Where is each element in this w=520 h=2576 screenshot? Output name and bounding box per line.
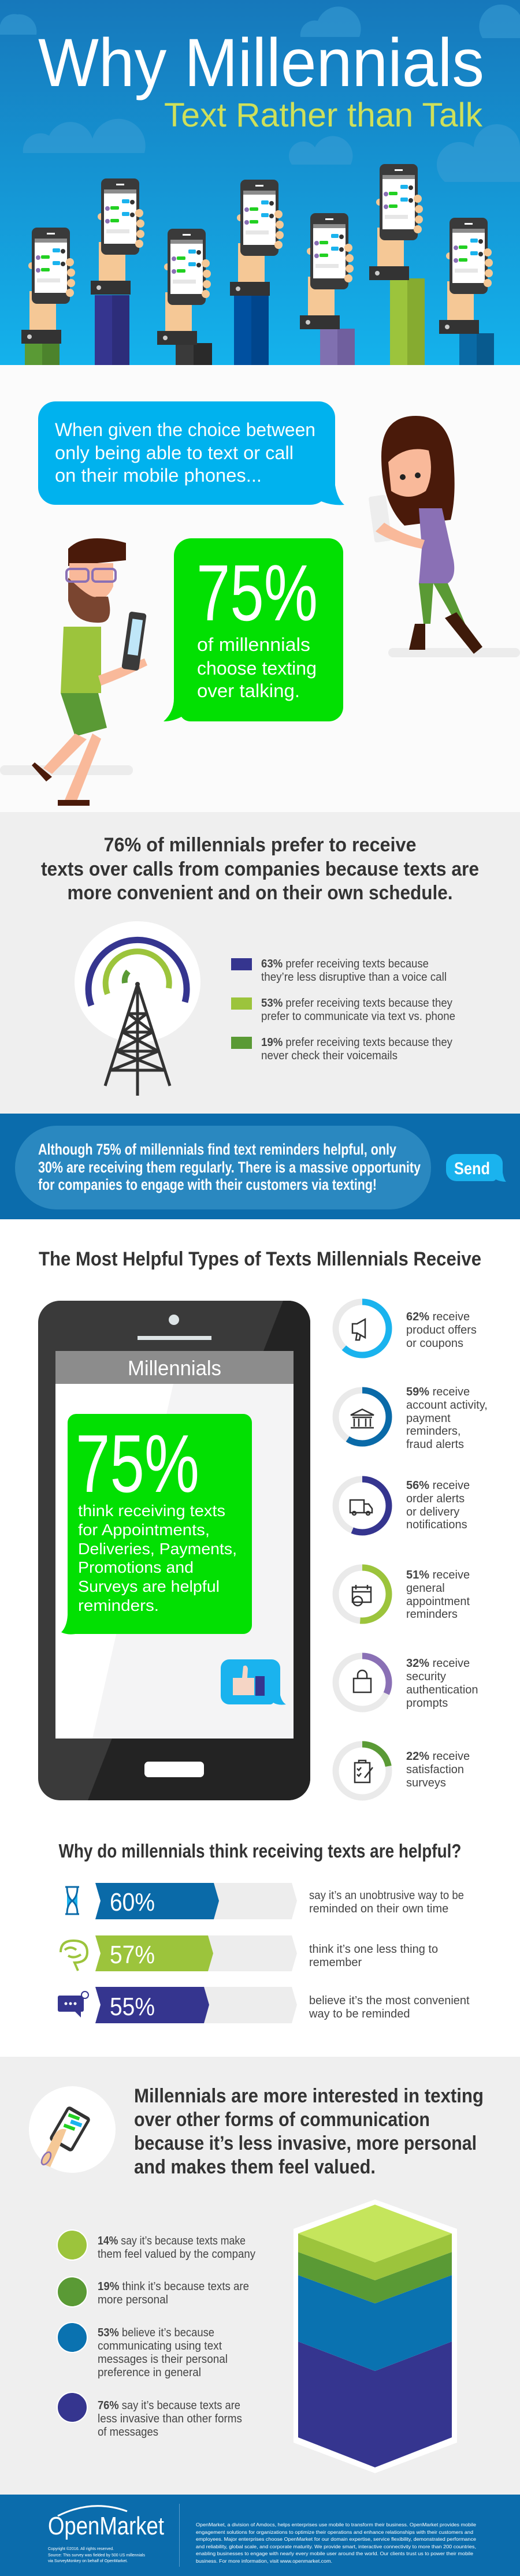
icon: thumbs up bubble bbox=[221, 1659, 286, 1705]
icon: signal tower bbox=[75, 921, 200, 1096]
bar chart: reasons helpful: reminded on their own time bbox=[309, 1903, 448, 1915]
text: 30% are receiving them regularly. There is a massive opportunity bbox=[38, 1159, 421, 1176]
copyright and source: Source: This survey was fielded by 500 US millennials bbox=[48, 2553, 145, 2558]
heading: more interested: because it’s less invasive, more personal bbox=[134, 2132, 477, 2154]
footer about text: OpenMarket, a division of Amdocs, helps enterprises use mobile to transform their business. OpenMarket provides mobile bbox=[196, 2522, 476, 2527]
section: texting vs calling background bbox=[0, 365, 520, 812]
legend: reasons interested: messages is their personal bbox=[98, 2353, 228, 2366]
legend: reasons interested: 14% say it’s because texts make bbox=[98, 2235, 246, 2247]
heading: more interested: over other forms of communication bbox=[134, 2109, 430, 2131]
donut labels: product offers bbox=[406, 1324, 477, 1337]
green bubble: 75% helpful: Surveys are helpful bbox=[78, 1577, 220, 1595]
big phone illustration: Millennials bbox=[128, 1356, 221, 1380]
donut labels: general bbox=[406, 1582, 445, 1595]
icon: hourglass bbox=[65, 1887, 79, 1914]
heading: more interested bbox=[134, 2085, 484, 2178]
speech bubble: question bbox=[38, 401, 344, 505]
bar chart: reasons helpful: think it’s one less thing to bbox=[309, 1943, 438, 1956]
donut labels: 22% receive bbox=[406, 1750, 470, 1763]
donut labels: fraud alerts bbox=[406, 1438, 464, 1451]
footer about text: enabling businesses to engage with nearly every mobile user around the world. Our clients trust us to power their mobile bbox=[196, 2551, 473, 2556]
guy character bbox=[0, 538, 147, 806]
bar chart: reasons helpful: remember bbox=[309, 1956, 362, 1969]
text: Although 75% of millennials find text reminders helpful, only bbox=[38, 1141, 396, 1158]
speech bubble: question: only being able to text or call bbox=[55, 442, 294, 463]
girl character bbox=[369, 416, 520, 657]
legend: reasons interested: more personal bbox=[98, 2294, 168, 2306]
banner: opportunity bbox=[0, 1114, 520, 1219]
donut labels: order alerts bbox=[406, 1492, 465, 1505]
donut labels: or delivery bbox=[406, 1506, 459, 1518]
donut labels: authentication bbox=[406, 1684, 478, 1696]
heading: most helpful types: The Most Helpful Types of Texts Millennials Receive bbox=[39, 1248, 481, 1270]
green bubble: 75% helpful: Promotions and bbox=[78, 1558, 194, 1576]
donut labels: reminders, bbox=[406, 1425, 460, 1438]
footer about text: business. For more information, visit www.openmarket.com. bbox=[196, 2558, 332, 2564]
legend: reasons interested: 76% say it’s because texts are bbox=[98, 2399, 240, 2412]
copyright and source bbox=[48, 2547, 145, 2563]
heading: 76% prefer texts bbox=[41, 834, 479, 904]
section: preference for texts from companies bbox=[0, 812, 520, 1114]
heading: more interested: Millennials are more interested in texting bbox=[134, 2085, 484, 2107]
heading: more interested: and makes them feel valued. bbox=[134, 2156, 376, 2178]
footer about text: and reliability, global scale, and corporate maturity. We provide smart, interactive connectivity to more than 200 countries, bbox=[196, 2544, 476, 2549]
legend: reasons interested bbox=[57, 2230, 255, 2439]
bar chart: reasons helpful: way to be reminded bbox=[309, 2008, 410, 2020]
donut labels: 51% receive bbox=[406, 1569, 470, 1581]
icon: hand with tablet bbox=[29, 2086, 116, 2173]
footer about text: employees. Major enterprises choose OpenMarket for our domain expertise, service flexibility, demonstrated performance bbox=[196, 2536, 476, 2542]
footer bbox=[0, 2495, 520, 2576]
donut labels: 56% receive bbox=[406, 1479, 470, 1492]
heading: 76% prefer texts: texts over calls from companies because texts are bbox=[41, 858, 479, 880]
green bubble: 75% helpful: reminders. bbox=[78, 1596, 159, 1614]
footer about text: engagement solutions for organizations to optimize their operations and enhance relationships with their customers and bbox=[196, 2529, 473, 2535]
donut labels: 62% receive bbox=[406, 1311, 470, 1323]
section: more interested in texting bbox=[0, 2057, 520, 2495]
legend: reasons interested: them feel valued by the company bbox=[98, 2248, 255, 2261]
hero background bbox=[0, 0, 520, 365]
donut labels: security bbox=[406, 1670, 446, 1683]
logo: OpenMarket: OpenMarket bbox=[48, 2512, 164, 2540]
speech bubble: 75% stat: choose texting bbox=[197, 658, 317, 679]
donut labels: appointment bbox=[406, 1595, 470, 1608]
green bubble: 75% helpful: Deliveries, Payments, bbox=[78, 1540, 237, 1558]
chart: stacked prism bbox=[294, 2199, 457, 2473]
legend: reasons interested: preference in general bbox=[98, 2366, 201, 2379]
legend: reasons interested: 53% believe it’s because bbox=[98, 2326, 214, 2339]
section: helpful types background bbox=[0, 1219, 520, 2057]
bar chart: reasons helpful: 55% bbox=[110, 1993, 155, 2021]
donut icons bbox=[350, 1319, 374, 1782]
green bubble: 75% helpful: 75% bbox=[76, 1418, 199, 1510]
speech bubble: question: When given the choice between bbox=[55, 419, 315, 440]
donut labels: prompts bbox=[406, 1697, 448, 1710]
legend: reasons interested: of messages bbox=[98, 2426, 158, 2439]
donut charts: types of texts bbox=[336, 1302, 389, 1797]
heading: 76% prefer texts: more convenient and on their own schedule. bbox=[67, 882, 453, 904]
bar chart: reasons helpful: 60% bbox=[110, 1888, 155, 1916]
bar chart: reasons helpful: say it’s an unobtrusive way to be bbox=[309, 1889, 464, 1902]
copyright and source: via SurveyMonkey on behalf of OpenMarket. bbox=[48, 2559, 128, 2563]
legend: reasons: 53% prefer receiving texts because they bbox=[261, 997, 452, 1010]
legend: reasons: 63% prefer receiving texts because bbox=[261, 958, 429, 970]
legend: reasons interested: 19% think it’s because texts are bbox=[98, 2280, 249, 2293]
green bubble: 75% helpful bbox=[61, 1414, 252, 1635]
big phone illustration bbox=[38, 1301, 310, 1800]
donut labels: payment bbox=[406, 1412, 451, 1425]
donut labels: or coupons bbox=[406, 1337, 463, 1350]
green bubble: 75% helpful: think receiving texts bbox=[78, 1502, 225, 1520]
decorative clouds bbox=[0, 5, 520, 182]
subtitle: Text Rather than Talk bbox=[164, 96, 483, 134]
donut labels: account activity, bbox=[406, 1399, 488, 1412]
speech bubble: 75% stat: over talking. bbox=[197, 680, 300, 701]
legend: reasons: never check their voicemails bbox=[261, 1049, 398, 1062]
legend: reasons bbox=[231, 958, 455, 1062]
bar chart: reasons helpful bbox=[95, 1883, 470, 2023]
donut labels: notifications bbox=[406, 1518, 467, 1531]
bar chart: reasons helpful: believe it’s the most convenient bbox=[309, 1994, 470, 2007]
icon: chat notification bbox=[58, 1991, 88, 2017]
speech bubble: question: on their mobile phones... bbox=[55, 465, 262, 486]
speech bubble: 75% stat: of millennials bbox=[197, 634, 310, 655]
send button bubble bbox=[446, 1154, 506, 1182]
send button bubble: Send bbox=[454, 1159, 490, 1178]
text: for companies to engage with their customers via texting! bbox=[38, 1176, 377, 1193]
donut labels: reminders bbox=[406, 1608, 458, 1621]
legend: reasons interested: communicating using text bbox=[98, 2340, 222, 2352]
donut labels bbox=[406, 1311, 488, 1789]
title: Why Millennials bbox=[38, 25, 484, 101]
legend: reasons: 19% prefer receiving texts because they bbox=[261, 1036, 452, 1049]
donut labels: 59% receive bbox=[406, 1386, 470, 1398]
donut labels: surveys bbox=[406, 1777, 446, 1789]
bar chart: reasons helpful: 57% bbox=[110, 1941, 155, 1969]
speech bubble: 75% stat: 75% bbox=[196, 549, 318, 638]
legend: reasons: they’re less disruptive than a voice call bbox=[261, 971, 447, 984]
legend: reasons interested: less invasive than other forms bbox=[98, 2413, 242, 2425]
icon: brain bbox=[61, 1941, 87, 1971]
legend: reasons: prefer to communicate via text vs. phone bbox=[261, 1010, 455, 1023]
green bubble: 75% helpful: for Appointments, bbox=[78, 1521, 210, 1539]
donut labels: satisfaction bbox=[406, 1763, 464, 1776]
copyright and source: Copyright ©2016. All rights reserved. bbox=[48, 2547, 114, 2551]
footer about text bbox=[196, 2522, 476, 2564]
donut labels: 32% receive bbox=[406, 1657, 470, 1670]
heading: 76% prefer texts: 76% of millennials prefer to receive bbox=[104, 834, 416, 856]
hands holding phones bbox=[21, 164, 494, 365]
speech bubble: 75% stat bbox=[164, 538, 343, 721]
